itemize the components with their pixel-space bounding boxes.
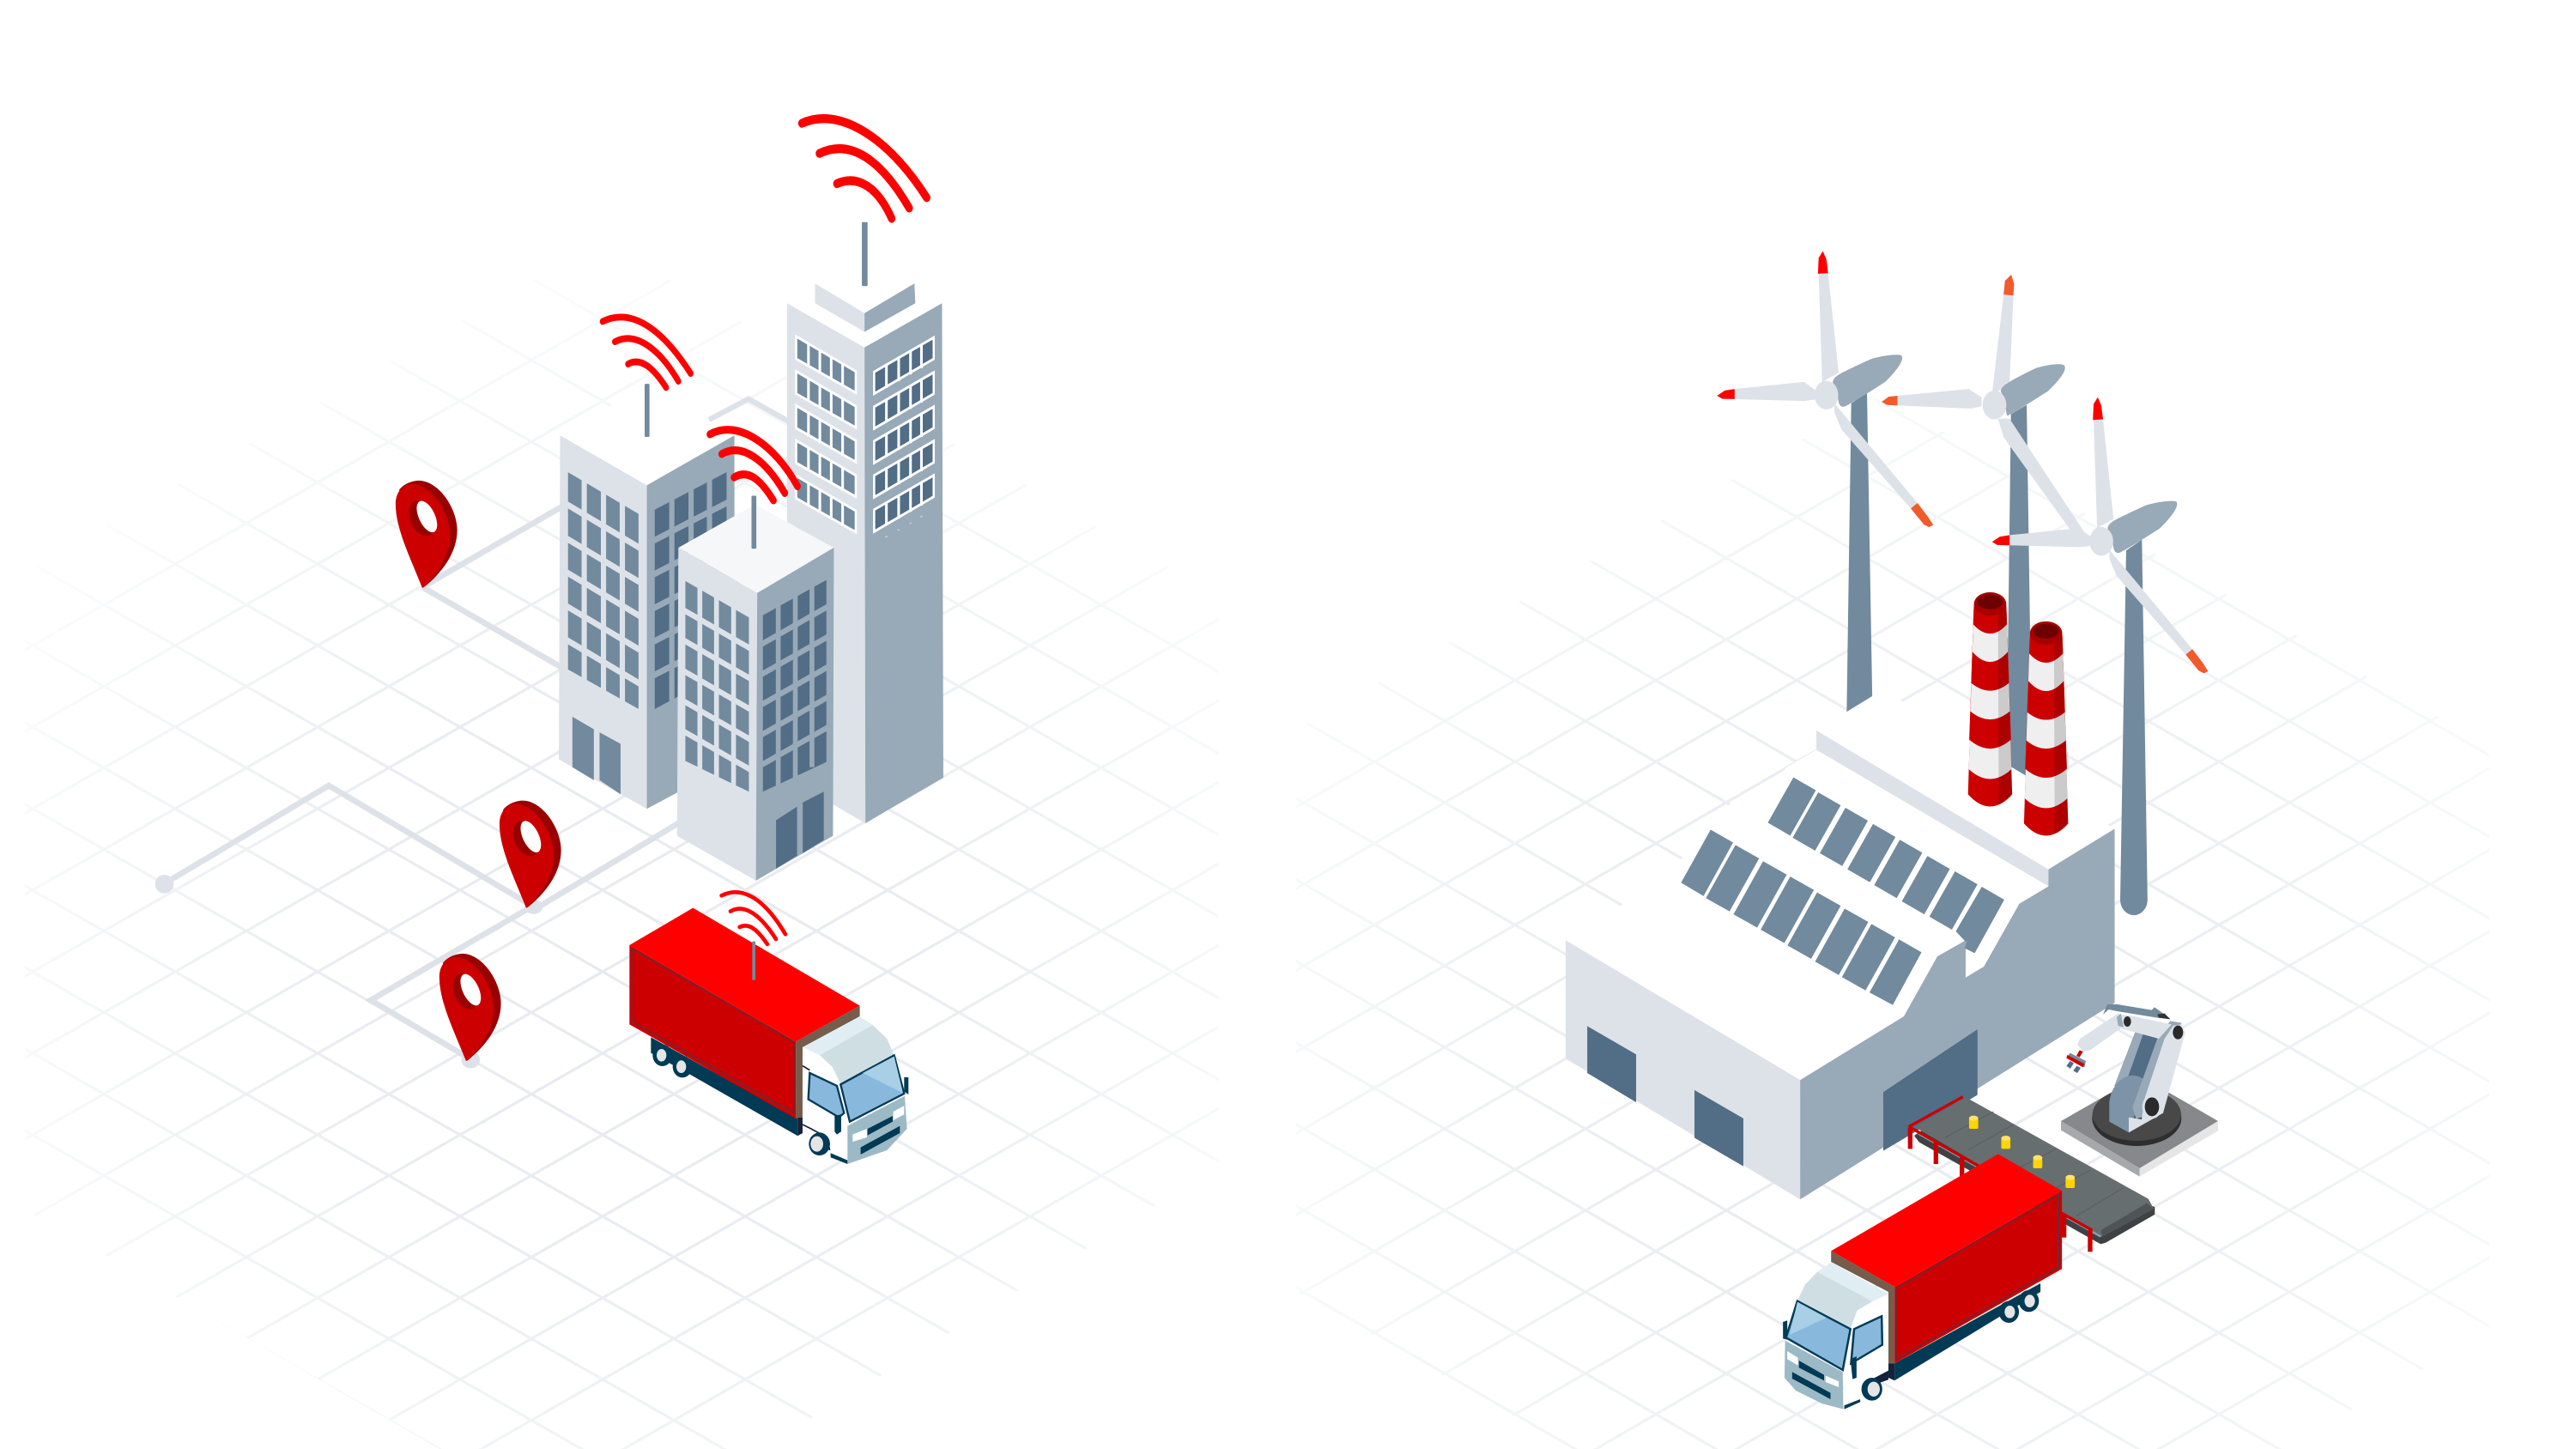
right windows [655, 472, 726, 709]
wifi signal [802, 118, 927, 219]
front office building [677, 430, 833, 881]
upper roof section [1733, 749, 2048, 978]
isometric floor grid: factory side [1296, 395, 2489, 1449]
left wall [1566, 940, 1800, 1199]
base shoulder [2109, 1076, 2146, 1132]
base plate [2061, 1076, 2218, 1168]
tall tower right windows [874, 337, 934, 537]
antenna [752, 495, 756, 549]
doors [776, 807, 797, 869]
upper arm [2117, 1015, 2172, 1039]
inner column [2114, 1033, 2161, 1088]
wind turbine 3 [1992, 397, 2208, 915]
solar panels: rear row [1767, 778, 2004, 953]
roof ridge face [1816, 731, 2048, 887]
factory building [1566, 690, 2115, 1199]
pin 1 [396, 481, 458, 588]
robot arm [2061, 1004, 2218, 1177]
right windows [763, 580, 827, 791]
front link [2132, 1021, 2182, 1119]
loading door [1883, 1029, 1978, 1151]
gripper [2076, 1050, 2083, 1058]
location routes on the ground [155, 504, 684, 1069]
yellow cans [1969, 1116, 2075, 1188]
doors [573, 717, 594, 780]
tall tower [787, 118, 943, 823]
isometric floor grid: city side [43, 372, 1219, 1449]
wind turbine 2 [1882, 275, 2088, 784]
pin 2 [500, 801, 561, 908]
left windows [685, 581, 749, 791]
solar panels: front row [1681, 829, 1922, 1005]
smokestack 1 [1968, 592, 2012, 807]
conveyor belt [1909, 1097, 2154, 1252]
rear roof [1816, 690, 2115, 870]
pin 3 [439, 954, 501, 1061]
wifi signal [722, 892, 785, 944]
wifi signal [710, 430, 797, 500]
tall tower left windows [797, 336, 856, 537]
lower roof section [1566, 803, 1966, 1080]
joints [2143, 1094, 2161, 1119]
antenna [752, 942, 755, 980]
left windows [568, 472, 639, 709]
forearm [2077, 1013, 2124, 1052]
right wall [1800, 828, 2115, 1199]
wifi signal [603, 317, 691, 387]
smokestack 2 [2024, 621, 2068, 836]
location pins [396, 481, 561, 1061]
route behind the towers [709, 399, 872, 468]
connected delivery truck [629, 892, 908, 1164]
antenna [862, 222, 868, 286]
red frame and legs [1909, 1097, 2092, 1230]
factory delivery truck [1783, 1154, 2062, 1410]
wind turbine 1 [1717, 251, 1933, 712]
windows [1587, 1026, 1636, 1102]
rear office building [559, 317, 735, 809]
antenna [645, 384, 650, 437]
top rail [2103, 1004, 2170, 1019]
